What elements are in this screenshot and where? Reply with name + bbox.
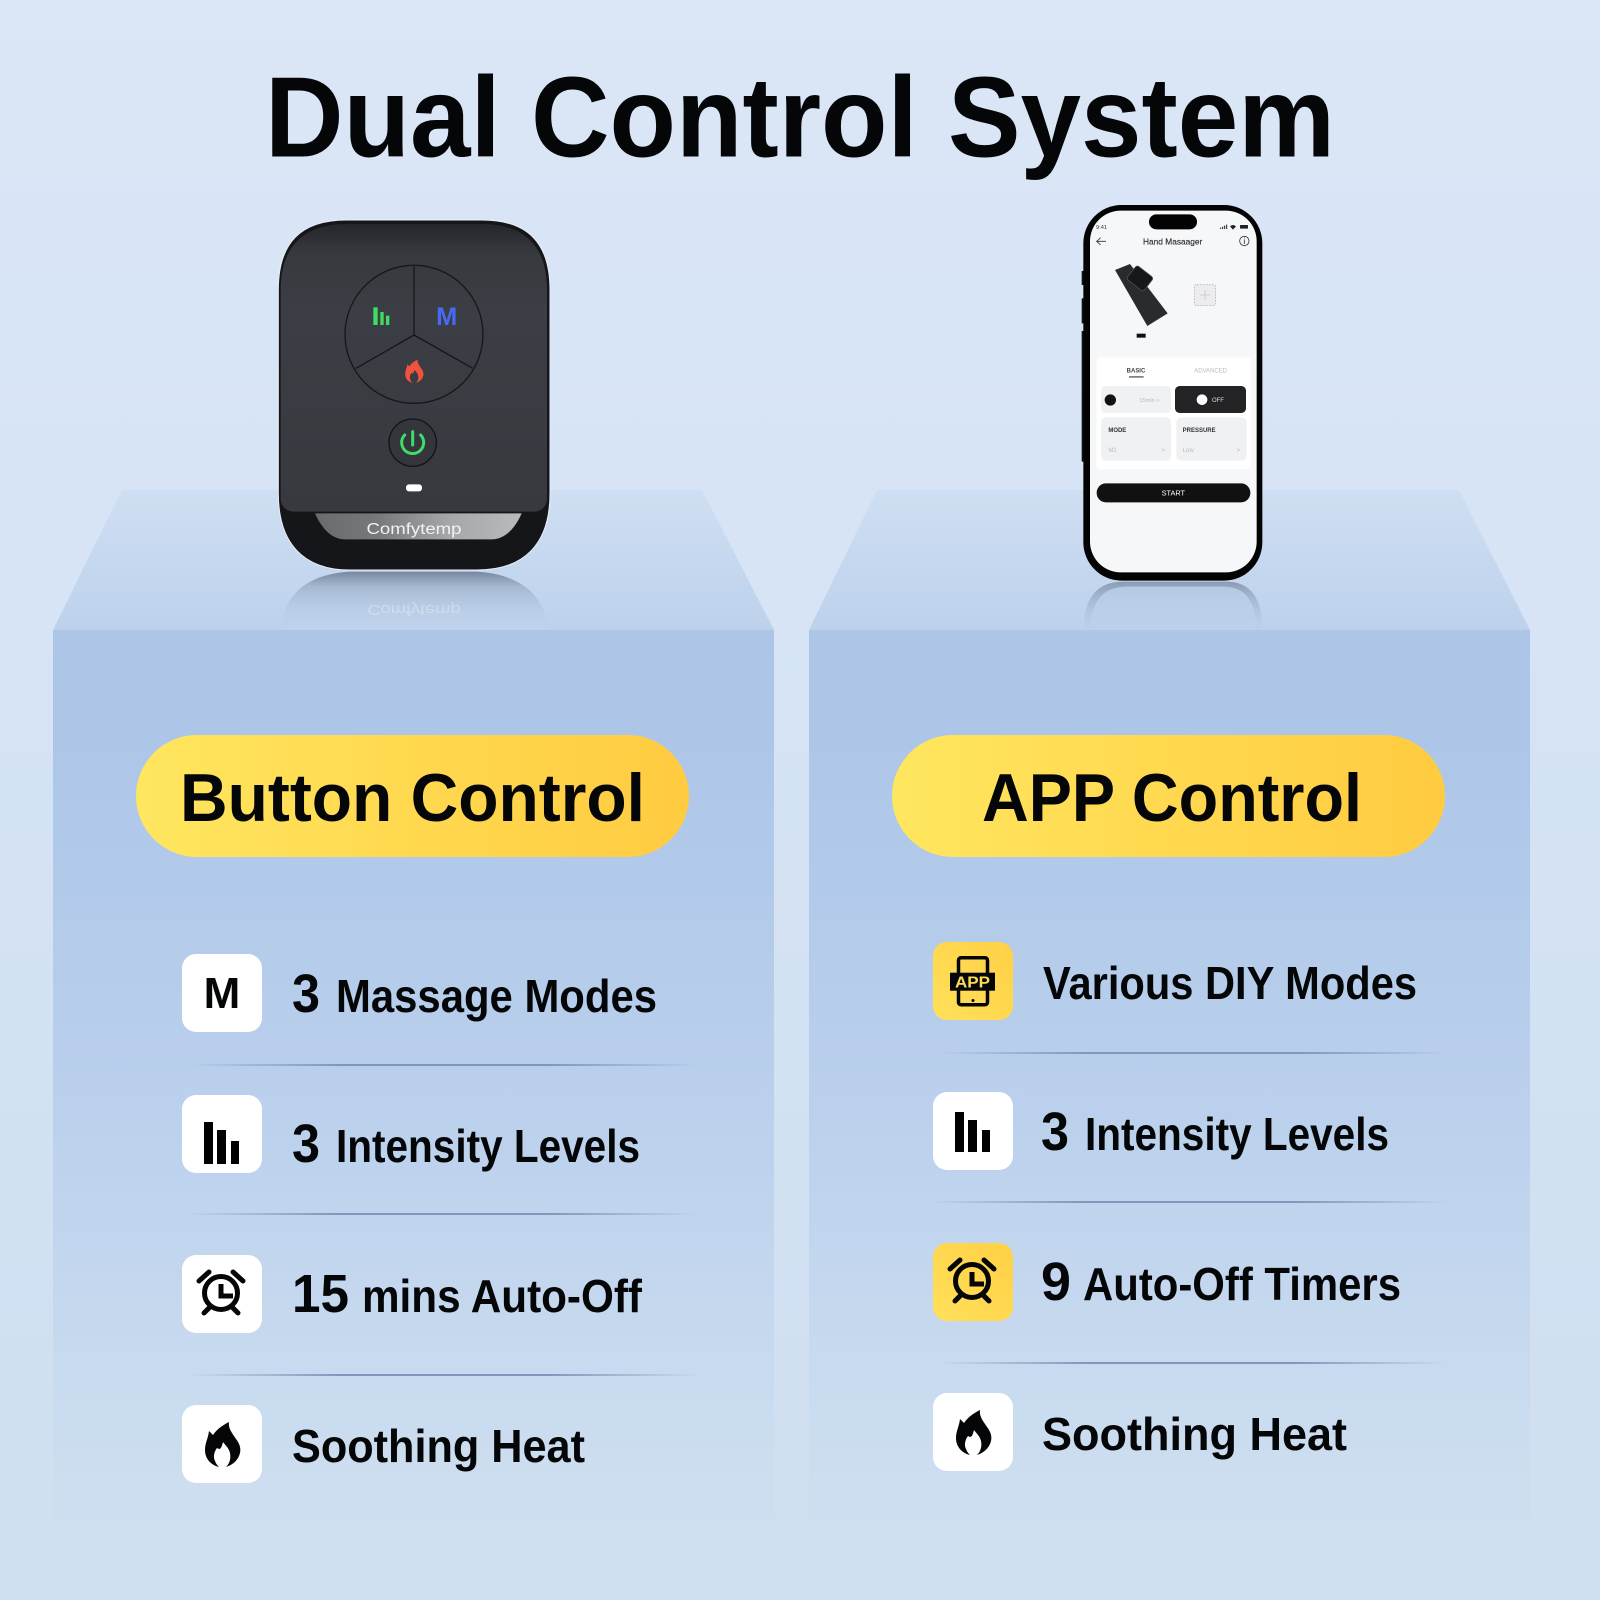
battery [1137,334,1146,338]
silver band [315,513,522,539]
phone body [1083,205,1262,581]
row: soothing heat [182,1405,585,1483]
row: 3 intensity levels: 3 [292,1114,320,1174]
panel top face [809,490,1530,630]
icon: flame [182,1405,262,1483]
mode button [1101,417,1171,461]
row: 3 intensity levels [182,1095,640,1174]
row: 3 massage modes: 3 [292,964,320,1024]
device body [278,220,550,570]
panel: app control [809,490,1530,1530]
app header: Hand Masaager [1143,236,1203,246]
row: 9 auto-off timers [933,1243,1401,1321]
status led [406,484,422,491]
icon: M: M [204,969,240,1018]
start button: START [1162,489,1186,498]
device: phone with app [1083,205,1262,628]
status bar [1096,225,1248,231]
row: 3 massage modes [182,954,657,1032]
row: 3 intensity levels: Intensity Levels [1085,1108,1389,1160]
pressure button: Low [1183,448,1194,454]
timer button [1101,386,1171,413]
mode button: M1 [1108,448,1117,454]
control card: ADVANCED [1194,369,1228,375]
icon: green bars [373,307,389,325]
icon: app tablet: APP [955,974,990,991]
dynamic island [1149,214,1197,229]
row: 3 intensity levels: 3 [1041,1102,1069,1162]
row: 15 mins auto-off: mins Auto-Off [362,1270,643,1322]
icon: blue M: M [436,303,457,331]
row: various diy modes: Various DIY Modes [1043,957,1417,1009]
panel front face [53,630,774,1530]
icon: bars [182,1095,262,1173]
start button [1097,483,1250,502]
row: 3 intensity levels [933,1092,1389,1170]
heading pill: button control: Button Control [180,760,645,836]
row: 3 intensity levels: Intensity Levels [336,1120,640,1172]
title: Dual Control System [265,54,1335,182]
heading pill: button control [136,735,689,857]
phone screen [1090,211,1257,572]
heading pill: app control: APP Control [982,760,1362,836]
mode button: MODE [1108,428,1126,434]
row: 9 auto-off timers: 9 [1041,1252,1071,1312]
device reflection: Comfytemp [367,601,461,617]
device face [281,224,547,512]
heading pill: app control [892,735,1445,857]
pressure button: PRESSURE [1183,428,1216,434]
icon: alarm clock yellow [933,1243,1013,1321]
app header [1097,236,1249,246]
triple button [345,265,483,403]
power button [389,419,436,466]
device: button controller [278,220,550,630]
icon: flame [933,1393,1013,1471]
brand name: Comfytemp [366,521,461,538]
heat off button: OFF [1212,398,1224,404]
phone reflection [1084,582,1262,628]
device reflection [282,572,548,630]
icon: app tablet [933,942,1013,1020]
row: soothing heat [933,1393,1347,1471]
control card: BASIC [1127,369,1146,375]
icon: bars [933,1092,1013,1170]
status bar: 9:41 [1096,225,1107,231]
timer button: 15min > [1139,398,1160,404]
panel front face [809,630,1530,1530]
pressure button [1176,417,1247,461]
icon: alarm clock [182,1255,262,1333]
icon: M [182,954,262,1032]
mode button: > [1162,448,1166,454]
control card [1097,357,1251,469]
pressure button: > [1237,448,1241,454]
row: 15 mins auto-off [182,1255,643,1333]
row: 15 mins auto-off: 15 [292,1264,349,1324]
row: 9 auto-off timers: Auto-Off Timers [1083,1258,1401,1310]
heat off button [1175,386,1246,413]
row: soothing heat: Soothing Heat [1042,1408,1347,1460]
product image [1115,264,1168,326]
icon: red flame [405,360,423,383]
panel: button control [53,490,774,1530]
side buttons [1080,271,1086,462]
add device [1194,284,1216,306]
panel top face [53,490,774,630]
row: soothing heat: Soothing Heat [292,1420,585,1472]
row: 3 massage modes: Massage Modes [336,970,657,1022]
row: various diy modes [933,942,1417,1020]
